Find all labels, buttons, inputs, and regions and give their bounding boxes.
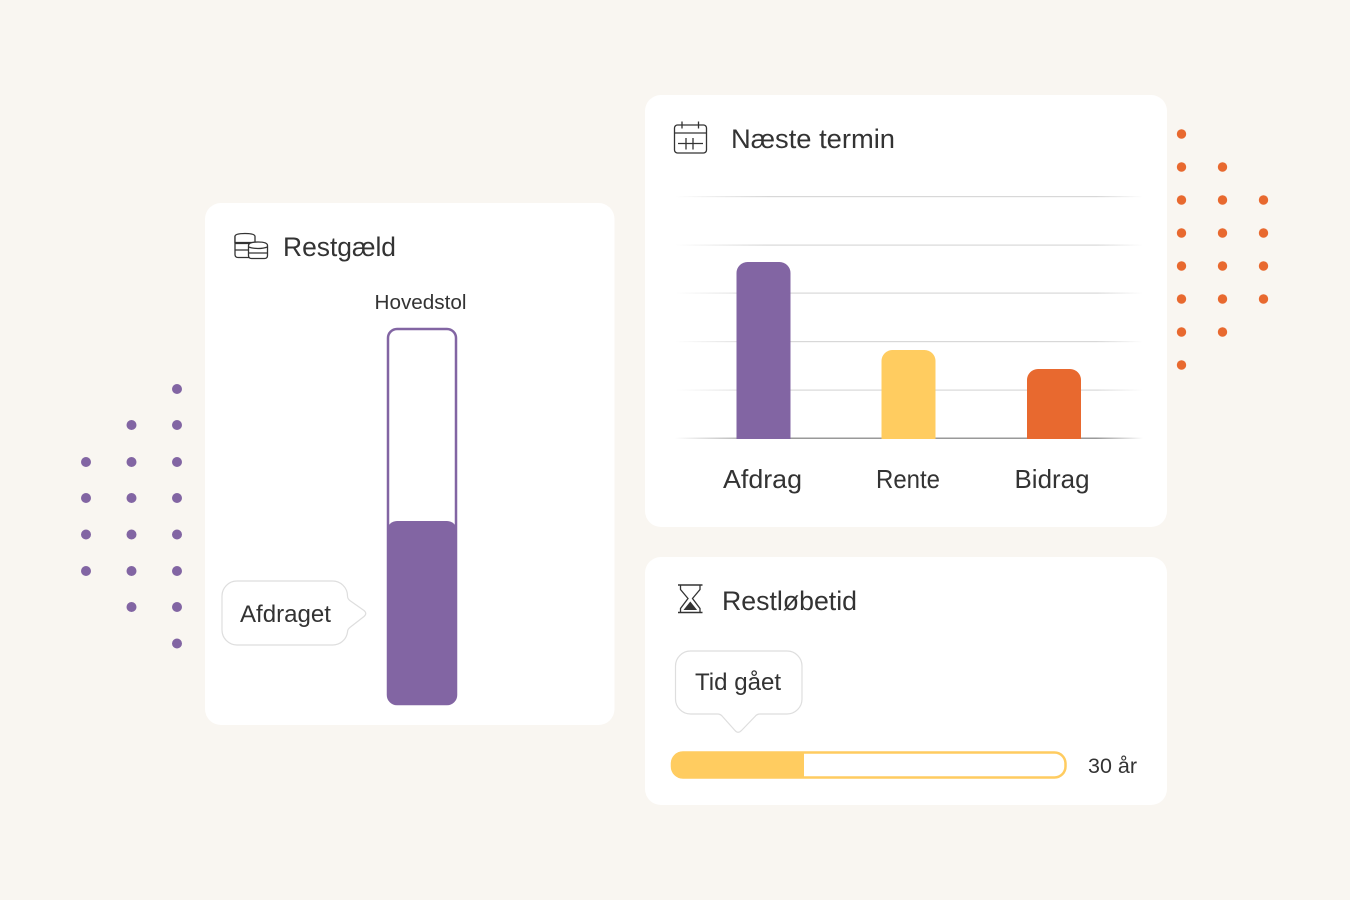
bar: Rente: [882, 350, 936, 439]
bar: Afdrag: [736, 262, 790, 439]
progress bar track: [672, 752, 1066, 778]
heading: Restløbetid: Restløbetid: [722, 586, 857, 616]
tube outline: [388, 329, 456, 704]
label: 30 år: 30 år: [1088, 755, 1137, 778]
callout: Tid gået: [676, 651, 802, 732]
label: Bidrag: Bidrag: [1014, 464, 1090, 494]
panel: Restløbetid: [645, 557, 1167, 805]
orange dot pattern: [1177, 129, 1268, 370]
label: Rente: Rente: [876, 464, 940, 494]
callout: Afdraget: Afdraget: [240, 601, 331, 628]
heading: Næste termin: Næste termin: [731, 124, 895, 154]
panel: Restgæld: [205, 203, 614, 725]
label: Hovedstol: Hovedstol: [374, 292, 466, 314]
purple dot pattern: [81, 384, 182, 648]
tube fill: Afdraget amount: [387, 521, 457, 705]
label: Afdrag: Afdrag: [723, 464, 802, 494]
icon: hourglass: [678, 585, 702, 612]
icon: coin stacks: [235, 234, 268, 258]
callout: Tid gået: Tid gået: [695, 669, 781, 696]
heading: Restgæld: Restgæld: [283, 232, 396, 262]
panel: Næste termin: [645, 95, 1167, 527]
bar: Bidrag: [1027, 369, 1081, 439]
bar chart: [675, 196, 1143, 494]
progress bar fill: [671, 752, 804, 778]
callout: Afdraget: [222, 581, 366, 645]
icon: calendar: [674, 122, 706, 153]
